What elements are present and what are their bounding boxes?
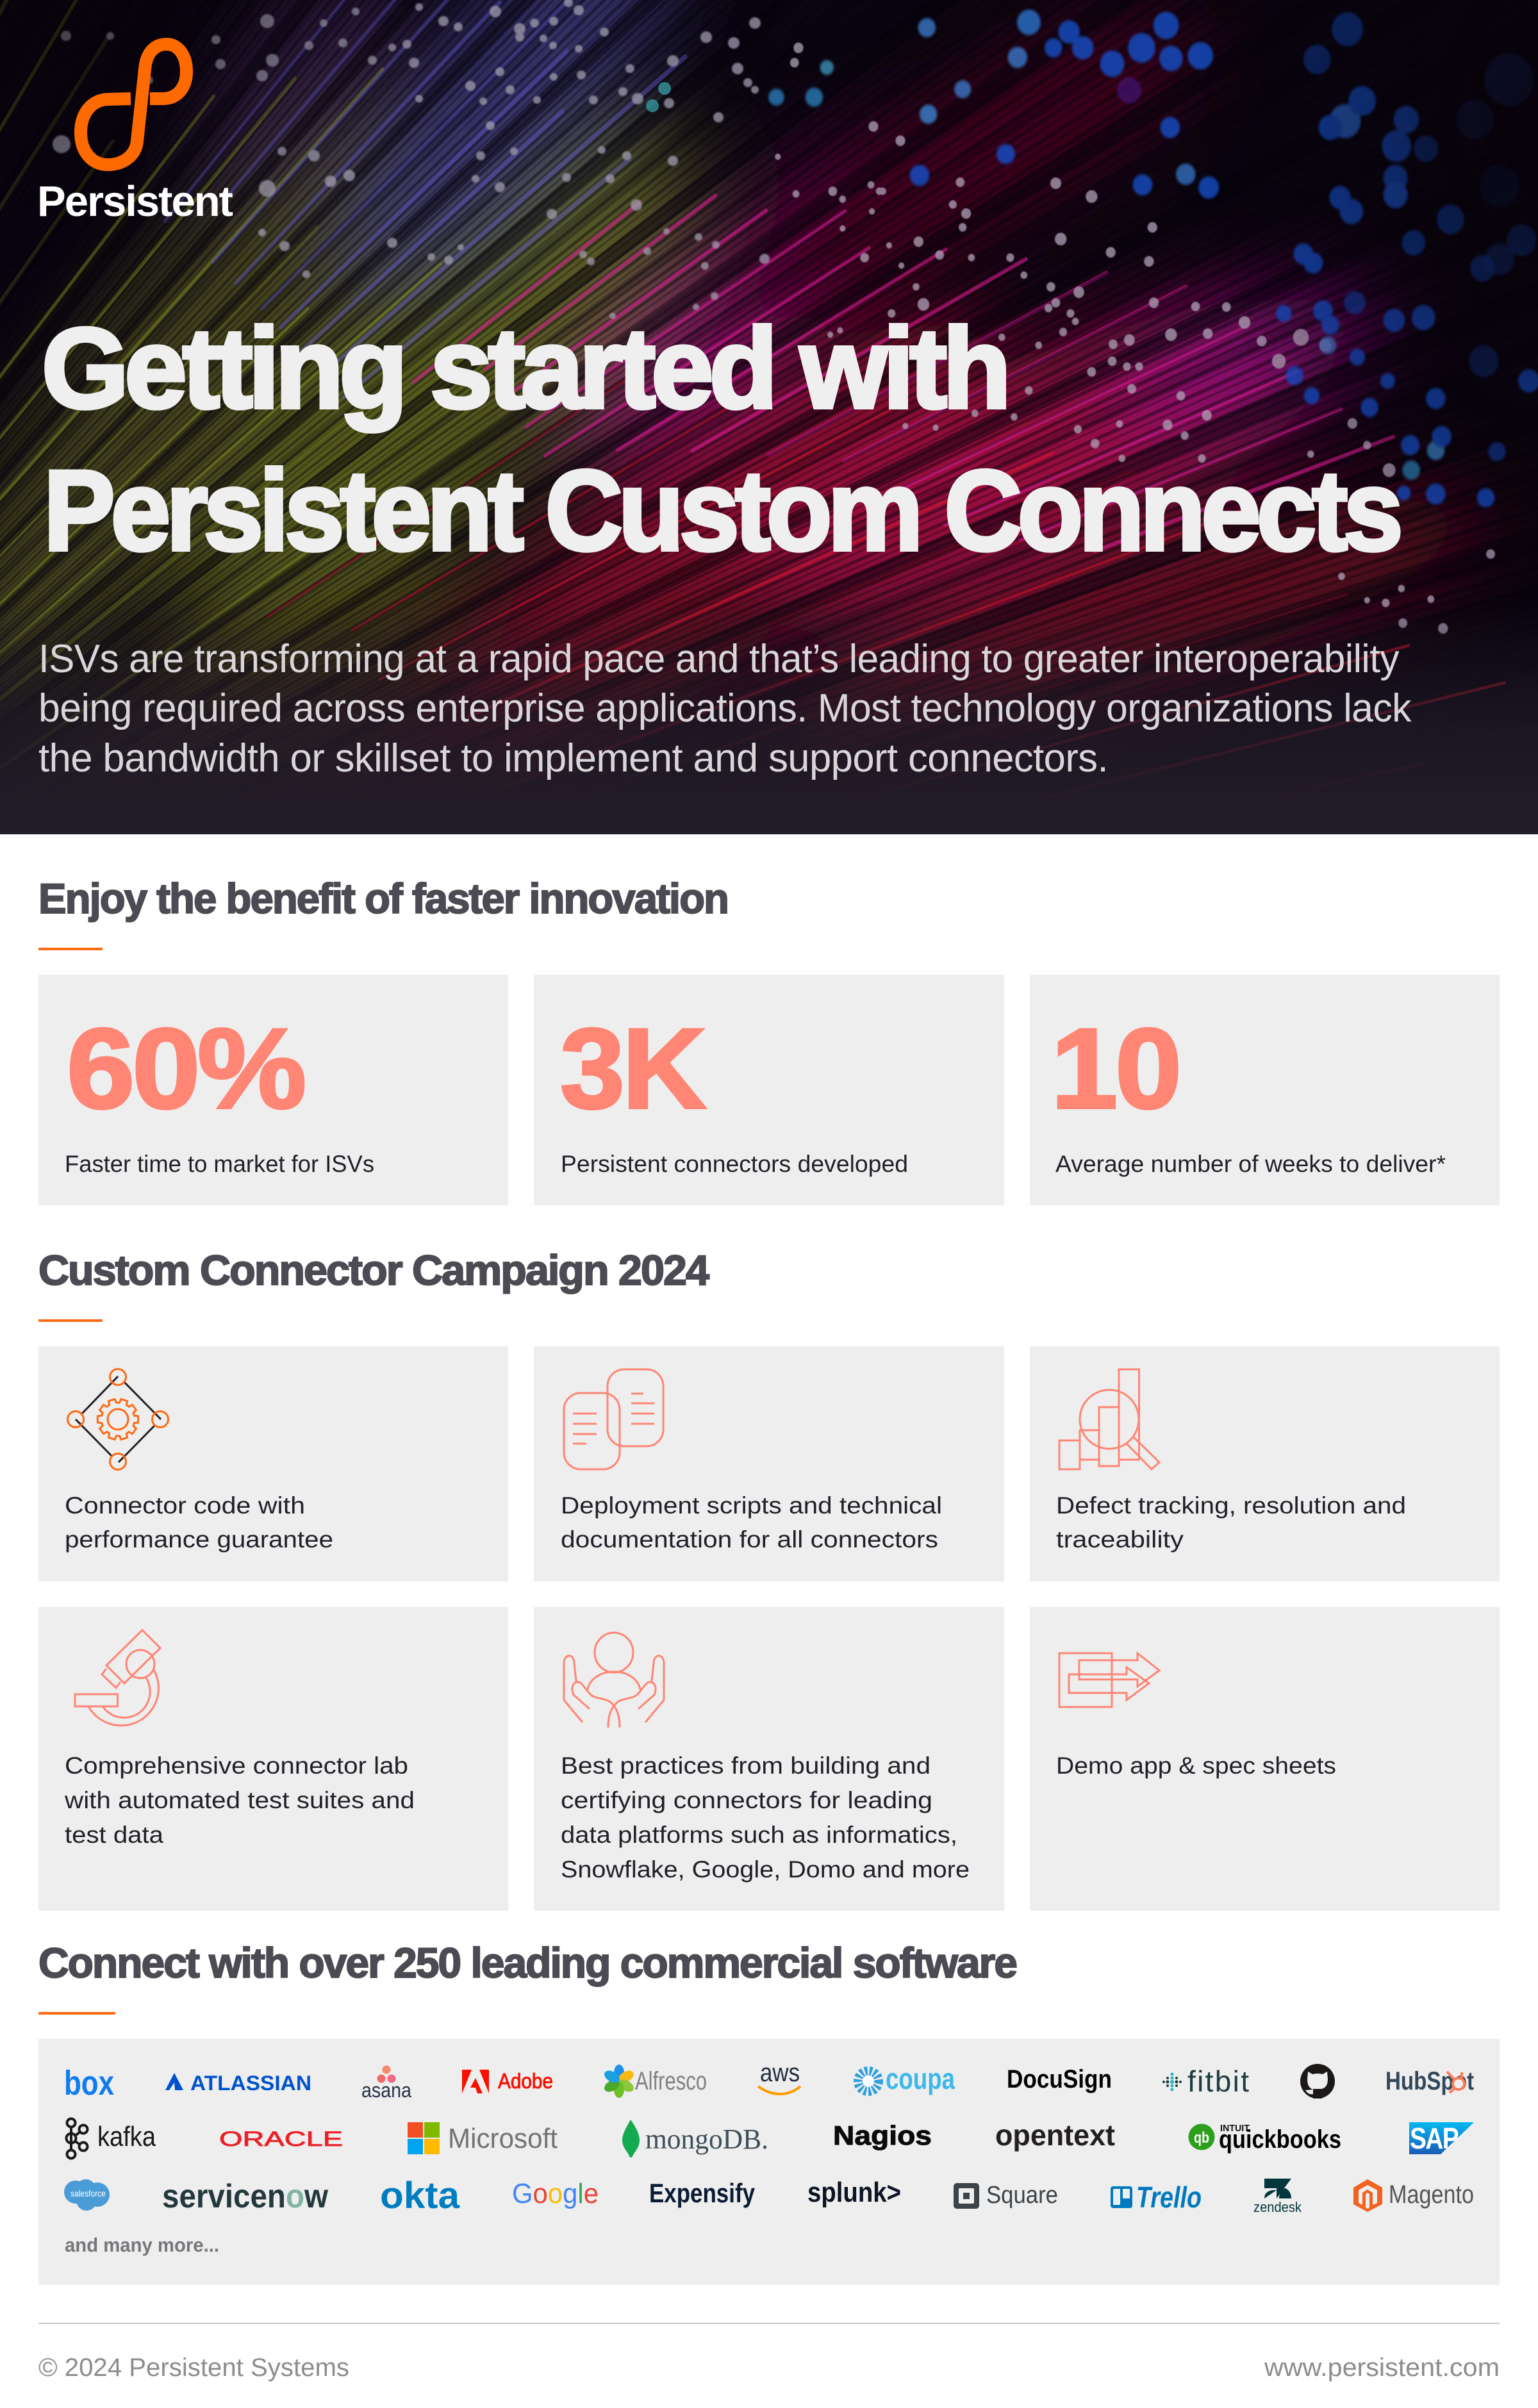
logo: QuickBooks <box>1188 2123 1341 2154</box>
logo: Atlassian: ATLASSIAN <box>190 2072 311 2095</box>
logo: aws: aws <box>760 2059 800 2087</box>
logo: aws <box>758 2059 800 2094</box>
stat label: Faster time to market for ISVs <box>65 1151 374 1177</box>
logo: Oracle: ORACLE <box>219 2127 343 2150</box>
logo: kafka: kafka <box>97 2121 156 2152</box>
logo: Nagios: Nagios <box>833 2120 932 2150</box>
card text: Demo app & spec sheets <box>1056 1752 1336 1779</box>
panel: stat 60% <box>38 975 508 1205</box>
card text <box>561 1752 970 1883</box>
logo: Zendesk <box>1253 2179 1302 2215</box>
card text <box>1056 1492 1406 1553</box>
icon: chart with magnifier <box>1059 1369 1159 1469</box>
stat number: 10 <box>1051 1005 1179 1132</box>
logo: GitHub <box>1300 2064 1335 2099</box>
logo: Persistent <box>37 44 233 226</box>
card text <box>64 1752 415 1848</box>
note: and many more: and many more... <box>65 2234 219 2256</box>
heading: faster innovation: Enjoy the benefit of faster innovation <box>38 875 728 922</box>
logo: Splunk: splunk> <box>807 2177 901 2208</box>
stat number: 3K <box>560 1005 705 1132</box>
logo: OpenText: opentext <box>995 2118 1115 2152</box>
intro paragraph <box>38 637 1412 780</box>
hero background: fibre optics photo <box>0 0 1538 834</box>
intro paragraph: being required across enterprise applications. Most technology organizations lack <box>38 686 1412 730</box>
logo: coupa: coupa <box>886 2062 955 2095</box>
logo: Trello: Trello <box>1136 2181 1202 2214</box>
icon: gear in diamond network <box>68 1369 168 1470</box>
card text: Connector code with <box>65 1492 305 1519</box>
logo: ServiceNow: servicenow <box>162 2178 329 2215</box>
logo: MongoDB <box>622 2120 768 2157</box>
title: Getting started with <box>42 304 1007 432</box>
logo: Square: Square <box>986 2182 1058 2209</box>
icon: person in hands <box>564 1633 664 1728</box>
card text: data platforms such as informatics, <box>561 1822 957 1848</box>
card text: traceability <box>1056 1526 1184 1553</box>
logo: Okta: okta <box>380 2175 460 2216</box>
card text <box>65 1492 333 1553</box>
logo: MongoDB: mongoDB. <box>645 2123 768 2155</box>
logo: Adobe <box>462 2069 553 2093</box>
logo: asana <box>361 2066 411 2102</box>
heading: connect: Connect with over 250 leading commercial software <box>38 1939 1016 1986</box>
logo: asana: asana <box>361 2079 411 2102</box>
card text: with automated test suites and <box>64 1787 415 1813</box>
stat label: Average number of weeks to deliver* <box>1055 1151 1446 1177</box>
logo: Google: Google <box>512 2178 599 2209</box>
panel: stat 10 <box>1030 975 1500 1205</box>
logo: box: box <box>64 2064 114 2102</box>
logo: HubSpot: HubSpot <box>1385 2067 1474 2095</box>
card text: test data <box>65 1822 163 1848</box>
panel: stat 3K <box>534 975 1004 1205</box>
icon: Persistent infinity mark <box>81 44 186 165</box>
logo: coupa <box>858 2062 955 2095</box>
logo: Salesforce <box>64 2179 110 2211</box>
logo: Microsoft <box>408 2122 558 2154</box>
panel: best practices <box>534 1607 1004 1911</box>
card text: Deployment scripts and technical <box>561 1492 942 1519</box>
stat label: Persistent connectors developed <box>561 1151 908 1177</box>
logo: Alfresco <box>602 2065 707 2098</box>
intro paragraph: ISVs are transforming at a rapid pace and that’s leading to greater interoperability <box>38 637 1400 681</box>
card text: Snowflake, Google, Domo and more <box>561 1856 970 1883</box>
card text <box>561 1492 942 1553</box>
intro paragraph: the bandwidth or skillset to implement and support connectors. <box>38 736 1108 780</box>
panel: demo app <box>1030 1607 1500 1911</box>
logo: Trello <box>1111 2181 1202 2214</box>
logo: Salesforce: salesforce <box>70 2188 106 2198</box>
footer: copyright: © 2024 Persistent Systems <box>38 2354 349 2382</box>
logo: QuickBooks: quickbooks <box>1219 2125 1341 2154</box>
logo: fitbit: fitbit <box>1187 2065 1249 2098</box>
icon: arrows out of box <box>1059 1653 1159 1707</box>
footer: website: www.persistent.com <box>1264 2354 1500 2382</box>
panel: deployment scripts <box>534 1346 1004 1581</box>
fibre tips: grey dots right <box>775 42 1495 634</box>
heading: campaign: Custom Connector Campaign 2024 <box>38 1246 709 1294</box>
fibre strands <box>0 0 1505 943</box>
logo: Magento: Magento <box>1389 2181 1474 2209</box>
title: Persistent Custom Connects <box>44 447 1399 574</box>
logo: Microsoft: Microsoft <box>448 2123 558 2154</box>
logo: DocuSign: DocuSign <box>1007 2065 1112 2093</box>
fibre tips: teal dots <box>646 82 671 112</box>
icon: microscope <box>75 1630 160 1726</box>
logo wordmark: Persistent <box>37 177 233 226</box>
card text: documentation for all connectors <box>561 1526 938 1553</box>
logo: SAP: SAP <box>1410 2122 1459 2155</box>
panel: connector lab <box>38 1607 508 1911</box>
fibre tips: grey dots left <box>53 0 770 319</box>
panel: connector code <box>38 1346 508 1581</box>
logo: Expensify: Expensify <box>649 2178 756 2208</box>
title <box>42 304 1399 574</box>
card text: performance guarantee <box>65 1526 333 1553</box>
logo: QuickBooks: INTUIT <box>1220 2123 1250 2134</box>
panel: defect tracking <box>1030 1346 1500 1581</box>
logo: Square <box>954 2182 1058 2209</box>
logo: Zendesk: zendesk <box>1253 2199 1302 2215</box>
logo: Alfresco: Alfresco <box>635 2067 707 2095</box>
stat number: 60% <box>67 1005 304 1132</box>
card text: certifying connectors for leading <box>561 1787 932 1813</box>
logo: Adobe: Adobe <box>498 2069 553 2093</box>
card text: Comprehensive connector lab <box>65 1752 408 1779</box>
panel: partner logos <box>38 2039 1500 2285</box>
card text: Defect tracking, resolution and <box>1056 1492 1406 1519</box>
fibre tips: blue bokeh dots <box>768 10 1538 507</box>
logo: Magento <box>1353 2179 1474 2212</box>
logo: kafka <box>67 2118 156 2158</box>
card text: Best practices from building and <box>561 1752 930 1779</box>
logo: QuickBooks: qb <box>1194 2129 1209 2147</box>
icon: two documents <box>564 1369 663 1469</box>
